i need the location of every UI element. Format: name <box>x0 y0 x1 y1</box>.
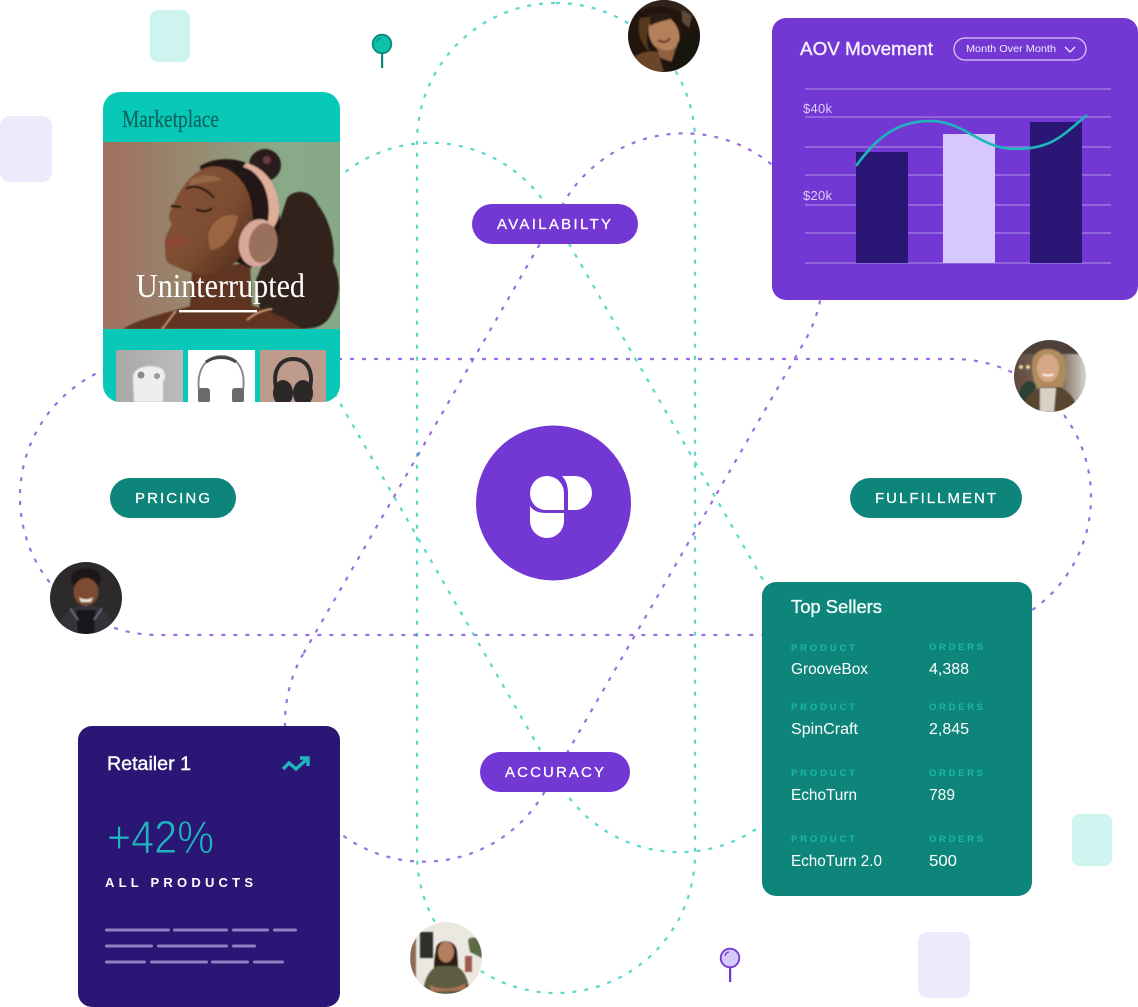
row: GrooveBox: GrooveBox <box>791 661 868 678</box>
panel: retailer card <box>78 726 340 1007</box>
row: SpinCraft: 2,845 <box>929 721 969 738</box>
product thumbnails <box>116 350 326 402</box>
row: EchoTurn: EchoTurn <box>791 787 857 804</box>
row: EchoTurn: PRODUCT <box>791 768 855 779</box>
avatar: man left <box>50 562 122 634</box>
label pill: fulfillment <box>850 478 1022 518</box>
grid lines <box>805 89 1111 263</box>
label pill: accuracy <box>480 752 630 792</box>
row: SpinCraft: ORDERS <box>929 702 983 713</box>
row: EchoTurn 2.0: PRODUCT <box>791 834 855 845</box>
label pill: pricing: PRICING <box>135 490 210 507</box>
row: EchoTurn <box>791 768 983 804</box>
row: GrooveBox: 4,388 <box>929 661 969 678</box>
row: SpinCraft: PRODUCT <box>791 702 855 713</box>
marketplace heading: Marketplace <box>122 107 219 133</box>
hero photo: woman with headphones <box>103 142 340 329</box>
row: GrooveBox: ORDERS <box>929 642 983 653</box>
icon: trending up arrow <box>283 758 308 769</box>
row: GrooveBox <box>791 642 983 678</box>
bars <box>856 122 1082 263</box>
avatar: woman top <box>628 0 700 72</box>
row: EchoTurn 2.0: ORDERS <box>929 834 983 845</box>
all products label: ALL PRODUCTS <box>105 875 253 890</box>
panel: marketplace card <box>103 92 340 410</box>
row: SpinCraft <box>791 702 983 738</box>
panel: top sellers table <box>762 582 1032 896</box>
axis labels <box>803 101 832 203</box>
row: SpinCraft: SpinCraft <box>791 721 859 738</box>
avatar: woman bottom <box>410 922 482 994</box>
axis labels: $40k <box>803 101 832 116</box>
row: EchoTurn 2.0: 500 <box>929 853 957 870</box>
pin: purple <box>721 949 739 982</box>
row: EchoTurn: 789 <box>929 787 955 804</box>
trend line <box>856 115 1087 166</box>
axis labels: $20k <box>803 188 832 203</box>
table title: Top Sellers <box>791 596 882 617</box>
dropdown pill: Month Over Month <box>966 43 1056 55</box>
big percentage: +42% <box>107 811 214 863</box>
row: EchoTurn 2.0 <box>791 834 983 870</box>
central logo <box>476 426 631 580</box>
panel: AOV Movement chart <box>772 18 1138 300</box>
label pill: availability <box>472 204 638 244</box>
label pill: availability: AVAILABILTY <box>497 216 611 233</box>
dropdown pill <box>954 38 1086 60</box>
pin: teal <box>373 35 391 68</box>
row: EchoTurn: ORDERS <box>929 768 983 779</box>
label pill: pricing <box>110 478 236 518</box>
avatar: woman right <box>1014 340 1086 412</box>
chart title: AOV Movement <box>800 38 933 59</box>
row: GrooveBox: PRODUCT <box>791 643 855 654</box>
placeholder text lines <box>105 928 297 964</box>
hero title: Uninterrupted <box>136 268 305 305</box>
label pill: accuracy: ACCURACY <box>505 764 604 781</box>
row: EchoTurn 2.0: EchoTurn 2.0 <box>791 853 882 870</box>
label pill: fulfillment: FULFILLMENT <box>875 490 996 507</box>
retailer title: Retailer 1 <box>107 753 191 775</box>
